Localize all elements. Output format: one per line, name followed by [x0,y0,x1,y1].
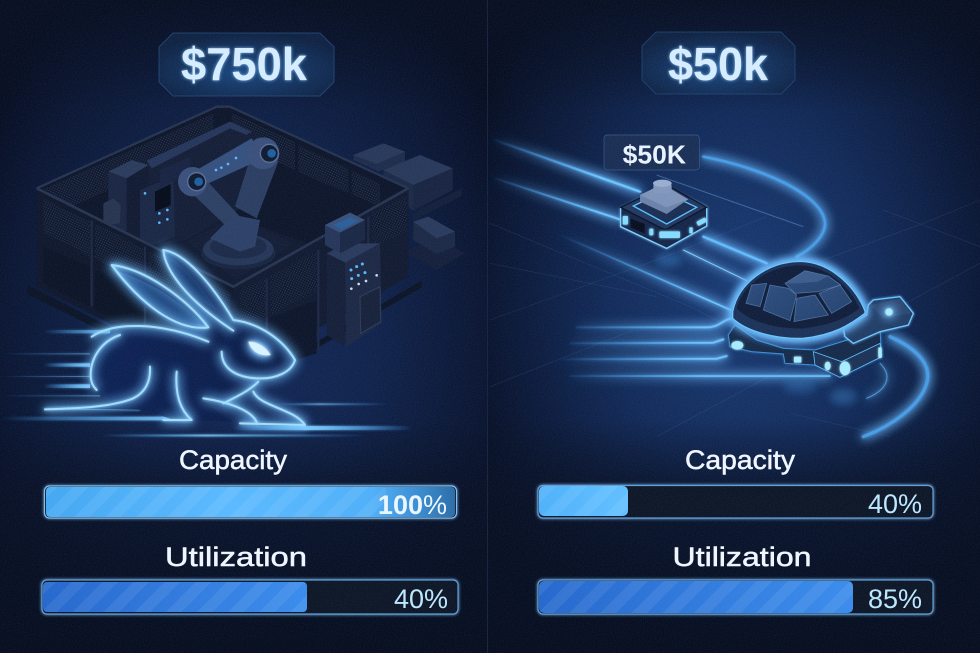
label tag: $50K [604,135,699,170]
robot arm [178,137,293,280]
panel: affordable steady turtle cell [488,0,980,653]
capacity bar: 100% [44,486,456,520]
floor grid lines [490,200,980,437]
utilization bar: 40% [42,580,458,614]
machine cabinets at the back [103,122,252,250]
pallets with stacked boxes [353,143,465,270]
status lights on back cabinet [144,192,169,224]
turtle shell [733,261,865,338]
panel: expensive fast rabbit cell [0,0,487,653]
utilization bar: 85%: 85% [868,584,922,614]
shell scutes [746,271,852,322]
turtle chassis and front block [728,325,882,377]
metric label: Capacity: Capacity [179,445,288,475]
metric label: Capacity: Capacity [685,445,796,475]
turtle head [843,297,913,343]
utilization bar: 85% [538,580,933,614]
base plate of the work cell [27,281,422,397]
capacity bar: 40%: 40% [868,489,922,519]
price badge: $50k: $50k [668,38,768,90]
control cabinet with lights [325,213,382,347]
capacity bar: 40% [538,486,933,519]
label tag: $50K: $50K [623,139,686,169]
AGV robot [621,180,707,267]
price badge: $750k [159,33,334,96]
price badge: $750k: $750k [181,38,307,90]
utilization bar: 40%: 40% [394,584,448,614]
back and floor of the fenced area [37,107,408,367]
illustration: robot work cell and pallets [27,107,465,397]
rabbit eye [248,342,271,355]
turtle lights [731,341,882,375]
front fence walls [37,188,408,385]
metric label: Utilization: Utilization [165,542,307,572]
icon: robotic turtle [728,261,913,405]
rabbit silhouette [43,250,305,425]
price badge: $50k [642,32,795,94]
capacity bar: 100%: 100% [378,490,447,520]
rabbit neon outline [45,250,305,425]
speed lines [0,330,413,437]
metric label: Utilization: Utilization [672,542,812,572]
icon: glowing rabbit [0,250,413,437]
illustration: floor grid, trails, AGV and turtle [490,135,980,437]
light trails [490,138,928,437]
